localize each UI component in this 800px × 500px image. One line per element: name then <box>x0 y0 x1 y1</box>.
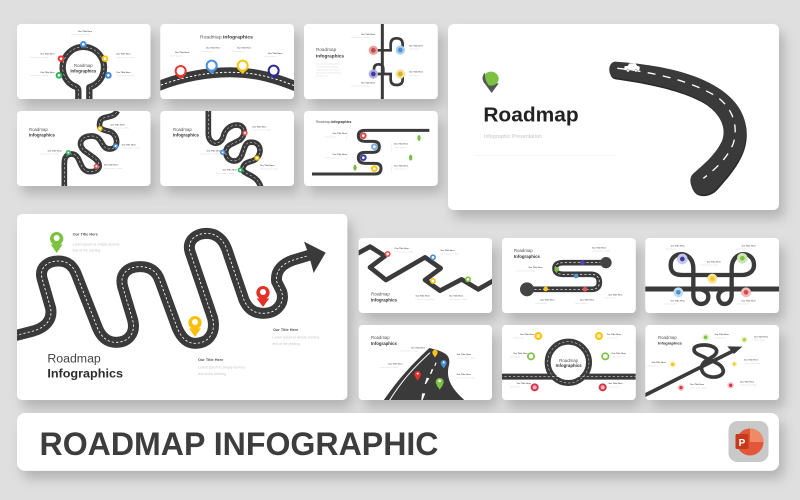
icon: PowerPoint <box>728 421 768 462</box>
callouts: Our Title Here <box>388 363 403 366</box>
road: vertical with loops <box>373 24 403 99</box>
heading <box>316 47 344 58</box>
callout: green: text of the printing <box>73 248 100 252</box>
panel: S-curve road slide <box>502 238 636 313</box>
callouts: Our Title Here <box>449 295 464 298</box>
road <box>383 348 465 401</box>
callout: green <box>73 233 120 252</box>
callouts <box>665 244 757 306</box>
markers <box>669 334 748 391</box>
heading: Roadmap <box>658 335 677 340</box>
callouts: Our Title Here <box>652 361 667 364</box>
callouts: Our Title Here <box>690 383 705 386</box>
callouts: Lorem ipsum simply <box>690 387 706 389</box>
callouts: Lorem ipsum is <box>232 51 244 53</box>
pins <box>360 132 378 172</box>
pins <box>220 130 260 173</box>
callouts: Lorem ipsum <box>607 337 618 339</box>
callout: red: text of the printing <box>272 342 300 346</box>
panel: main winding roadmap slide <box>15 214 347 400</box>
panel: isometric zigzag slide <box>357 238 493 313</box>
callouts: Our Title Here <box>206 47 221 50</box>
callouts: Lorem ipsum is simply <box>122 148 140 150</box>
paragraph <box>316 64 341 77</box>
title: Roadmap <box>483 105 579 127</box>
road <box>208 110 261 187</box>
panel: circular roadmap slide <box>17 24 150 100</box>
callouts: Our Title Here <box>457 353 472 356</box>
callouts: Our Title Here <box>237 47 252 50</box>
heading <box>371 335 398 346</box>
callout: yellow: Lorem ipsum is simply dummy <box>198 366 245 370</box>
heading <box>173 127 200 138</box>
heading: Roadmap <box>29 127 48 132</box>
callouts <box>517 246 623 305</box>
callouts: Lorem ipsum is simply <box>457 357 475 359</box>
callouts: Our Title Here <box>333 132 348 135</box>
callouts: Lorem ipsum is simply <box>71 34 90 36</box>
pins <box>527 332 609 391</box>
road: arch <box>157 72 298 87</box>
callouts <box>324 131 409 173</box>
callouts: Lorem ipsum is simply <box>30 75 48 77</box>
heading: Roadmap <box>514 248 533 253</box>
callouts: Lorem ipsum is <box>535 303 548 305</box>
callouts: Lorem ipsum is simply <box>380 367 398 369</box>
callouts: Lorem ipsum <box>510 386 521 388</box>
icon: logo pin <box>483 72 499 93</box>
callouts: Our Title Here <box>207 149 222 152</box>
heading: Infographics <box>371 341 398 346</box>
callouts <box>30 30 135 77</box>
pin: red <box>256 286 270 307</box>
road <box>312 130 429 174</box>
callouts: Our Title Here <box>260 164 275 167</box>
panel: winding road slide one <box>17 111 150 187</box>
callouts: Our Title Here <box>111 123 126 126</box>
callouts: Our Title Here <box>361 33 376 36</box>
heading: Roadmap <box>74 63 93 68</box>
callouts: Lorem ipsum is <box>324 157 337 159</box>
callouts: Lorem ipsum is simply <box>116 57 135 59</box>
callouts: Our Title Here <box>608 293 623 296</box>
subtitle: Infographic Presentation <box>484 134 542 140</box>
panel: arched road slide <box>157 24 298 99</box>
banner title: ROADMAP INFOGRAPHIC <box>40 426 438 462</box>
callouts: Our Title Here <box>580 299 595 302</box>
callouts: Lorem ipsum <box>612 356 623 358</box>
callouts: Lorem ipsum is simply <box>457 377 475 379</box>
heading: Infographics <box>47 367 123 381</box>
callouts: Lorem ipsum is <box>736 249 748 251</box>
heading: Roadmap Infographics <box>200 35 253 41</box>
heading: Roadmap <box>47 352 101 366</box>
panel: figure eight road slide <box>643 325 779 400</box>
callouts: Lorem ipsum <box>513 337 524 339</box>
pins <box>543 260 587 292</box>
road <box>64 111 117 187</box>
callouts: Lorem ipsum is simply <box>440 253 459 255</box>
callouts: Our Title Here <box>394 164 409 167</box>
callouts: Our Title Here <box>592 246 607 249</box>
callouts: Our Title Here <box>742 299 757 302</box>
pins <box>414 350 447 390</box>
callouts: Lorem ipsum is simply <box>216 173 234 175</box>
callouts: Our Title Here <box>395 247 410 250</box>
callouts: Lorem ipsum is simply <box>40 154 58 156</box>
heading: Infographics <box>29 133 56 138</box>
callout: green: Our Title Here <box>73 233 98 237</box>
callout: red: Lorem ipsum is simply dummy <box>272 336 319 340</box>
heading: Roadmap <box>316 47 337 52</box>
callouts: Our Title Here <box>416 295 431 298</box>
heading: Infographics <box>173 133 200 138</box>
callouts: Lorem ipsum <box>715 337 726 339</box>
callouts: Our Title Here <box>612 352 627 355</box>
divider <box>475 154 615 156</box>
callouts: Our Title Here <box>742 244 757 247</box>
callouts: Our Title Here <box>409 44 424 47</box>
callout: yellow: Our Title Here <box>198 358 223 362</box>
callouts: Lorem ipsum is simply <box>592 251 610 253</box>
callouts: Our Title Here <box>268 52 283 55</box>
heading: Infographics <box>514 254 541 259</box>
panel: looped junction slide <box>643 238 780 313</box>
callouts: Lorem ipsum <box>647 365 658 367</box>
callouts <box>351 33 424 87</box>
callouts <box>395 247 467 301</box>
panel: serpentine road slide <box>304 111 438 186</box>
pins <box>66 126 118 169</box>
callouts: Lorem ipsum <box>608 386 619 388</box>
callouts: Lorem ipsum is <box>394 147 406 149</box>
heading <box>29 127 56 138</box>
heading: Roadmap <box>371 335 390 340</box>
callouts: Our Title Here <box>744 359 759 362</box>
panel: ring road slide <box>500 325 637 400</box>
callouts: Lorem ipsum is <box>736 304 748 306</box>
heading <box>556 358 582 368</box>
trees <box>353 135 421 171</box>
callouts: Our Title Here <box>409 71 424 74</box>
callouts: Lorem ipsum is <box>263 56 276 58</box>
callouts: Lorem ipsum is <box>394 169 406 171</box>
callouts <box>200 125 278 175</box>
callouts: Our Title Here <box>540 299 555 302</box>
callouts: Lorem ipsum is simply <box>116 75 135 77</box>
callouts: Our Title Here <box>223 169 238 172</box>
callouts: Lorem ipsum is simply <box>416 299 434 301</box>
callouts: Lorem ipsum <box>409 48 420 50</box>
heading: Roadmap <box>559 358 579 363</box>
callouts: Our Title Here <box>740 380 755 383</box>
pin: green <box>50 232 63 253</box>
pins <box>369 45 405 79</box>
callouts: Lorem ipsum is simply <box>400 351 418 353</box>
callouts: Our Title Here <box>457 373 472 376</box>
heading <box>658 335 683 345</box>
paragraph: setting industry. Lorem ipsum <box>316 69 340 72</box>
callouts: Our Title Here <box>754 335 769 338</box>
callouts <box>380 346 475 379</box>
callouts: Our Title Here <box>361 81 376 84</box>
callouts: Lorem ipsum is simply <box>30 57 48 59</box>
road: curved <box>609 62 747 196</box>
heading <box>514 248 541 259</box>
callouts: Our Title Here <box>40 71 55 74</box>
road and arrow <box>643 345 742 396</box>
panel: bottom banner <box>17 413 779 471</box>
road <box>530 263 605 289</box>
callouts: Our Title Here <box>78 30 93 33</box>
callouts: Lorem ipsum is simply <box>517 270 535 272</box>
heading <box>70 63 97 73</box>
callouts: Our Title Here <box>517 382 532 385</box>
panel: perspective road slide <box>359 325 492 401</box>
road <box>357 247 493 291</box>
callouts: Our Title Here <box>607 333 622 336</box>
heading: Infographics <box>658 340 683 345</box>
callouts: Lorem ipsum is <box>665 304 677 306</box>
callout: red: Our Title Here <box>273 328 298 332</box>
callouts: Our Title Here <box>528 266 543 269</box>
start and end nodes <box>520 257 612 296</box>
pins <box>673 253 751 297</box>
callouts: Our Title Here <box>671 299 686 302</box>
callouts: Our Title Here <box>116 53 131 56</box>
paragraph: text ever since <box>316 74 328 77</box>
callouts: Lorem ipsum simply <box>740 385 756 387</box>
callouts: Our Title Here <box>333 153 348 156</box>
callouts: Lorem ipsum is simply <box>252 130 270 132</box>
callouts: Lorem ipsum <box>409 75 420 77</box>
road <box>643 254 780 304</box>
heading: Infographics <box>70 68 97 73</box>
panel: vertical junction slide <box>304 24 438 99</box>
callouts: Lorem ipsum is simply <box>351 37 369 39</box>
pins <box>175 60 280 79</box>
callouts: Our Title Here <box>175 51 190 54</box>
callouts: Our Title Here <box>48 149 63 152</box>
heading: Infographics <box>371 298 398 303</box>
heading: Roadmap <box>173 127 192 132</box>
pin: yellow <box>188 316 202 337</box>
road with arrow <box>15 233 326 343</box>
paragraph: Lorem ipsum is simply dummy <box>316 64 341 66</box>
callouts: Our Title Here <box>707 260 722 263</box>
callouts: Lorem ipsum is simply <box>104 168 122 170</box>
callouts: Our Title Here <box>252 125 267 128</box>
icon: car <box>624 63 640 72</box>
callouts: Our Title Here <box>608 382 623 385</box>
callouts <box>170 47 283 58</box>
callouts: Lorem ipsum is simply <box>700 265 718 267</box>
callouts: Our Title Here <box>122 143 137 146</box>
callouts: Our Title Here <box>671 244 686 247</box>
callouts: Our Title Here <box>411 346 426 349</box>
callouts: Our Title Here <box>440 249 455 252</box>
paragraph: text of the printing and type <box>316 66 338 69</box>
callouts: Lorem ipsum <box>510 356 521 358</box>
callouts: Lorem ipsum is <box>604 298 616 300</box>
callouts: Lorem ipsum is simply <box>449 299 467 301</box>
heading: Roadmap <box>371 292 390 297</box>
callouts: Lorem ipsum is simply <box>111 128 129 130</box>
heading: Roadmap Infographics <box>316 120 351 124</box>
callouts: Lorem ipsum is simply <box>260 168 278 170</box>
callout: yellow: text of the printing <box>198 372 226 376</box>
heading: Infographics <box>316 53 344 58</box>
paragraph: has been the standard dummy <box>316 72 341 75</box>
callouts: Our Title Here <box>520 333 535 336</box>
callouts: Our Title Here <box>40 53 55 56</box>
callouts: Lorem ipsum simply <box>744 363 760 365</box>
callouts: Lorem ipsum <box>754 340 765 342</box>
callouts: Our Title Here <box>104 164 119 167</box>
callouts: Lorem ipsum is simply <box>200 154 218 156</box>
heading <box>371 292 398 303</box>
pins <box>385 251 471 284</box>
icon: PowerPoint: P <box>739 438 746 449</box>
callouts <box>510 333 627 388</box>
callouts: Lorem ipsum is simply <box>395 251 413 253</box>
panel: roadmap cover slide <box>448 24 779 210</box>
callout: yellow <box>198 358 245 376</box>
callouts: Lorem ipsum is <box>665 249 677 251</box>
callouts: Our Title Here <box>715 333 730 336</box>
callouts: Our Title Here <box>116 71 131 74</box>
road: ring <box>63 47 104 100</box>
callout: red <box>272 328 319 346</box>
callouts: Lorem ipsum is <box>170 55 182 57</box>
panel: winding road slide two <box>160 110 294 187</box>
callouts: Lorem ipsum is <box>575 303 587 305</box>
callouts: Our Title Here <box>513 352 528 355</box>
heading <box>48 354 122 380</box>
road <box>500 342 637 383</box>
heading: Infographics <box>556 363 582 368</box>
callouts <box>647 333 769 389</box>
callouts <box>40 123 140 170</box>
callouts: Our Title Here <box>394 143 409 146</box>
callouts: Lorem ipsum is <box>324 136 337 138</box>
callouts: Lorem ipsum is simply <box>351 85 369 87</box>
pins <box>56 41 112 79</box>
callout: green: Lorem ipsum is simply dummy <box>73 242 120 246</box>
callouts: Lorem ipsum is <box>201 51 213 53</box>
